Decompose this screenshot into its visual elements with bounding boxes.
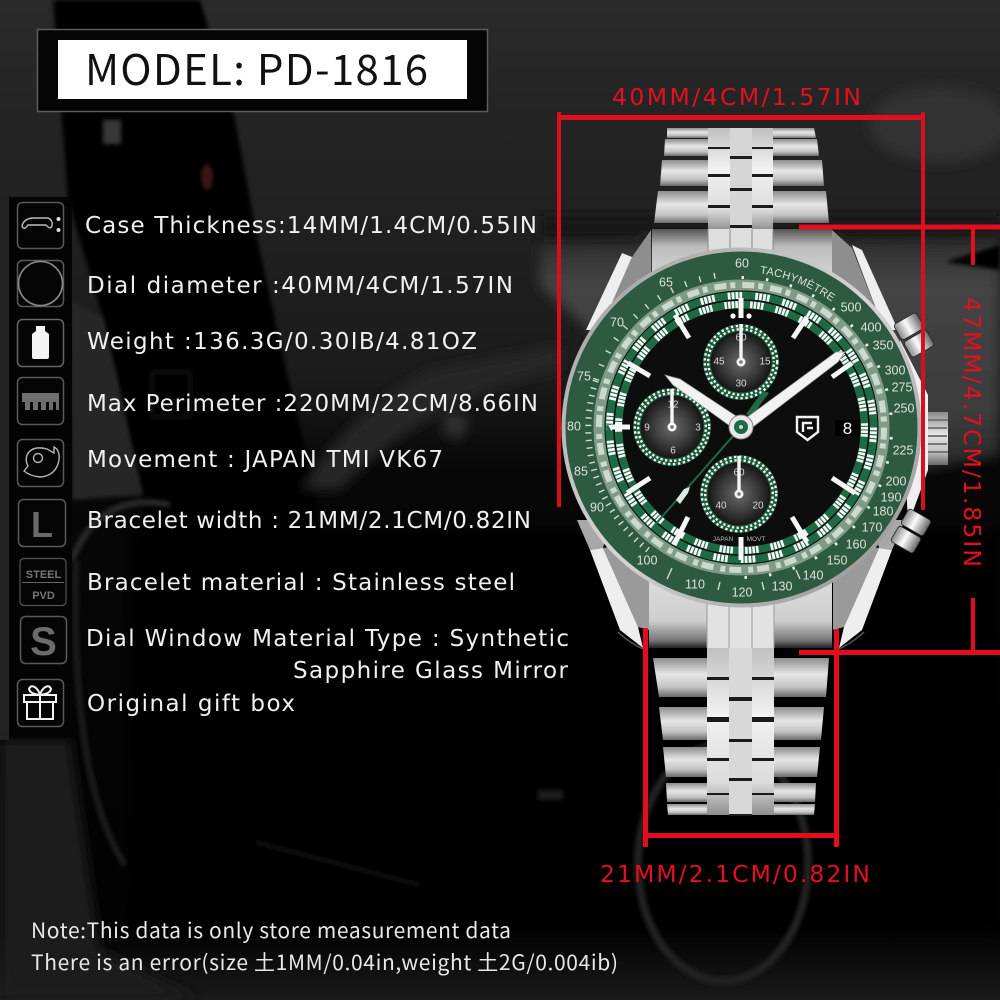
model banner — [38, 30, 488, 112]
subdial: top: 60 — [735, 333, 747, 344]
bezel scale numbers: 275 — [892, 380, 912, 394]
bezel scale numbers: 100 — [637, 553, 657, 567]
bezel scale numbers: 80 — [567, 419, 581, 433]
bezel scale numbers: 85 — [574, 464, 588, 478]
dimension: case width 40mm: 40MM/4CM/1.57IN — [612, 83, 861, 111]
bezel scale numbers: 75 — [577, 369, 591, 383]
dimension: bracelet width 21mm: 21MM/2.1CM/0.82IN — [600, 860, 870, 888]
hour markers — [612, 298, 855, 560]
subdial: bottom: 20 — [752, 501, 764, 512]
icon: case thickness — [18, 202, 64, 248]
icon: gift box — [18, 680, 64, 726]
bezel scale numbers: 500 — [841, 300, 861, 314]
dimension: case width 40mm — [558, 83, 924, 510]
bezel scale numbers: 70 — [610, 315, 624, 329]
specification list: Original gift box — [87, 691, 295, 717]
bezel scale numbers: TACHYMÈTRE — [760, 266, 836, 302]
subdial: left: 3 — [695, 423, 701, 434]
subdial: bottom: 40 — [715, 501, 727, 512]
icon: ruler — [18, 378, 64, 424]
bezel scale numbers: 190 — [881, 490, 901, 504]
date window — [835, 419, 860, 438]
bezel scale numbers: 300 — [885, 363, 905, 377]
specification list: Case Thickness:14MM/1.4CM/0.55IN — [85, 213, 537, 239]
bezel scale numbers: 140 — [803, 568, 823, 582]
subdial: top: 15 — [759, 357, 771, 368]
icon: sapphire S: S — [30, 620, 57, 664]
hour hand — [665, 375, 745, 431]
dimension: lug-to-lug 47mm: 47MM/4.7CM/1.85IN — [958, 297, 986, 567]
brand logo — [797, 417, 818, 440]
specification list: Movement : JAPAN TMI VK67 — [87, 447, 443, 473]
upper bracelet — [653, 128, 829, 230]
bezel scale numbers: 120 — [732, 585, 752, 599]
dial — [594, 280, 890, 576]
specification list: Bracelet material : Stainless steel — [87, 570, 515, 596]
specification list: Bracelet width : 21MM/2.1CM/0.82IN — [87, 508, 531, 534]
watch — [562, 128, 948, 816]
japan movt label: JAPAN — [713, 536, 734, 543]
subdial: bottom — [700, 455, 778, 533]
measurement note: There is an error(size 土1MM/0.04in,weight 土2G/0.004ib) — [31, 947, 618, 977]
measurement note — [31, 915, 618, 977]
bezel scale numbers: 110 — [685, 577, 705, 591]
bezel scale numbers: 225 — [893, 443, 913, 457]
bezel scale numbers: 90 — [590, 500, 604, 514]
icon: movement — [18, 440, 64, 486]
specification list: Max Perimeter :220MM/22CM/8.66IN — [87, 391, 538, 417]
subdial: top: 30 — [735, 379, 747, 390]
icon: sapphire S — [20, 616, 66, 664]
specification list: Dial diameter :40MM/4CM/1.57IN — [87, 273, 513, 299]
icon: steel pvd — [20, 558, 66, 606]
subdial: left: 9 — [644, 423, 650, 434]
bezel scale numbers: 250 — [894, 401, 914, 415]
specification list — [85, 213, 569, 717]
measurement note: Note:This data is only store measurement data — [31, 915, 511, 945]
bezel scale numbers: 130 — [772, 579, 792, 593]
subdial: left: 12 — [667, 400, 679, 411]
specification list: Dial Window Material Type : Synthetic — [86, 626, 569, 652]
icon column — [9, 197, 72, 738]
bezel scale numbers: 350 — [873, 338, 893, 352]
subdial: left — [633, 388, 711, 466]
subdial: top — [703, 324, 779, 400]
bezel ticks — [588, 274, 800, 590]
specification list: Sapphire Glass Mirror — [293, 658, 569, 684]
bezel scale numbers — [567, 256, 914, 599]
bezel scale numbers: 180 — [873, 504, 893, 518]
bezel scale numbers: 60 — [735, 256, 749, 270]
lower bracelet — [653, 648, 829, 816]
bezel scale numbers: 200 — [886, 474, 906, 488]
pushers — [890, 312, 935, 554]
icon: weight — [18, 320, 64, 366]
centre hub — [729, 415, 753, 439]
subdial: bottom: 60 — [733, 468, 745, 479]
subdial: top: 45 — [713, 357, 725, 368]
second hand — [653, 392, 768, 527]
icon: bracelet width L: L — [31, 504, 53, 545]
minute hand — [738, 352, 845, 433]
icon: dial diameter — [18, 260, 64, 306]
bezel scale numbers: 65 — [659, 275, 673, 289]
crown — [925, 412, 948, 465]
date window: 8 — [843, 419, 852, 438]
case and lugs — [577, 229, 928, 650]
model banner: MODEL: PD-1816 — [85, 37, 428, 98]
icon: bracelet width L — [18, 500, 66, 546]
bezel — [562, 248, 921, 608]
subdial: left: 6 — [670, 446, 676, 457]
bezel scale numbers: 160 — [846, 537, 866, 551]
specification list: Weight :136.3G/0.30IB/4.81OZ — [87, 329, 477, 355]
dimension: lug-to-lug 47mm — [799, 224, 1000, 655]
bezel scale numbers: 170 — [862, 520, 882, 534]
dimension: bracelet width 21mm — [600, 628, 870, 888]
japan movt label: MOVT — [747, 536, 765, 543]
icon: steel pvd: PVD — [32, 590, 55, 602]
icon: steel pvd: STEEL — [26, 569, 62, 581]
bezel scale numbers: 150 — [827, 553, 847, 567]
japan movt label — [713, 536, 765, 543]
bezel scale numbers: 400 — [861, 320, 881, 334]
